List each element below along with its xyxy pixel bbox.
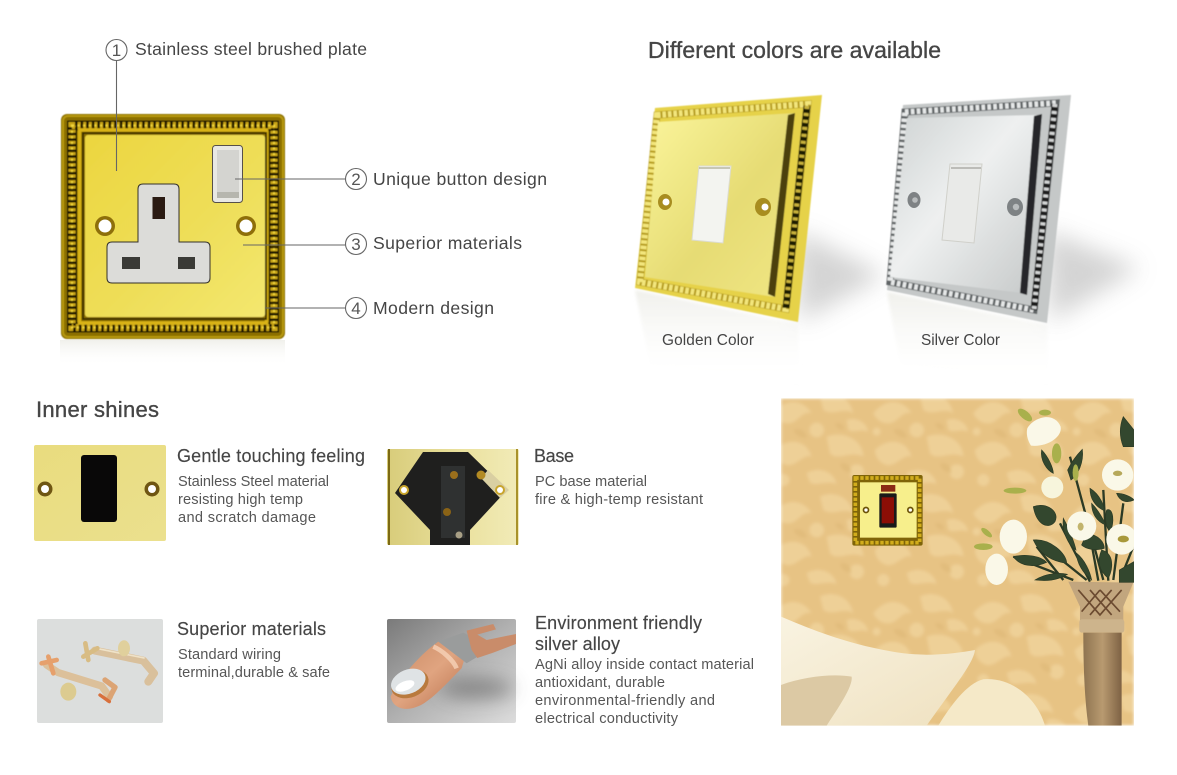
golden caption: Golden Color	[662, 332, 754, 349]
callout 4: 4	[351, 299, 361, 318]
silver screws	[908, 192, 1023, 216]
text block	[177, 446, 365, 526]
vase	[1068, 582, 1133, 726]
thumbnail: black base rear view	[387, 449, 519, 545]
silver reflection	[887, 292, 1050, 385]
callout 4: Modern design	[373, 298, 494, 318]
golden reflection	[635, 290, 800, 385]
text block: Gentle touching feeling	[177, 446, 365, 466]
heading: colors: Different colors are available	[648, 37, 941, 63]
text block	[534, 446, 703, 508]
text block: Base	[534, 446, 574, 466]
callout 3: Superior materials	[373, 233, 522, 253]
panel: main socket with callouts	[60, 39, 547, 366]
panel: base	[387, 446, 703, 545]
text block: fire & high-temp resistant	[535, 492, 703, 508]
text block	[177, 619, 330, 681]
text block	[535, 613, 754, 727]
buds	[974, 406, 1079, 550]
screw right	[236, 216, 256, 236]
text block: electrical conductivity	[535, 711, 679, 727]
thumbnail: brass terminals	[37, 619, 163, 723]
wall switch	[852, 475, 923, 546]
text block: silver alloy	[535, 634, 620, 654]
text block: Standard wiring	[178, 647, 281, 663]
panel: room photo	[781, 398, 1137, 726]
panel: superior materials	[37, 619, 330, 723]
text block: Environment friendly	[535, 613, 702, 633]
screw left	[95, 216, 115, 236]
callout 3: 3	[351, 235, 361, 254]
silver plate body	[887, 95, 1071, 323]
text block: AgNi alloy inside contact material	[535, 657, 754, 673]
text block: and scratch damage	[178, 510, 316, 526]
golden shadow	[795, 230, 885, 322]
callout 2	[235, 168, 547, 190]
panel: silver plate	[887, 95, 1140, 385]
sofa arm	[938, 679, 1045, 726]
large cushion	[781, 617, 975, 726]
golden rocker	[692, 166, 731, 243]
golden screws	[658, 194, 771, 216]
silver rocker	[942, 164, 982, 243]
text block: Superior materials	[177, 619, 326, 639]
callout 2: Unique button design	[373, 169, 547, 189]
text block: resisting high temp	[178, 492, 303, 508]
white flowers	[985, 417, 1137, 585]
thumbnail: copper contact with silver dome	[387, 619, 516, 723]
socket reflection	[60, 340, 285, 366]
golden plate body	[635, 95, 822, 322]
panel: golden plate	[635, 95, 885, 385]
flower stems and leaves	[1013, 417, 1134, 582]
silver shadow	[1045, 230, 1140, 322]
text block: PC base material	[535, 474, 647, 490]
callout 3	[243, 233, 522, 254]
text block: environmental-friendly and	[535, 693, 715, 709]
socket plate	[61, 114, 285, 339]
callout 4	[265, 298, 494, 318]
text block: antioxidant, durable	[535, 675, 665, 691]
thumbnail: brass plate with black rocker	[34, 445, 166, 541]
callout 2: 2	[351, 170, 361, 189]
heading: inner shines: Inner shines	[36, 397, 159, 422]
panel: gentle touching feeling	[34, 445, 365, 541]
damask wallpaper	[781, 398, 1134, 726]
text block: terminal,durable & safe	[178, 665, 330, 681]
callout 1: 1	[112, 41, 121, 60]
small patterned cushion	[781, 675, 852, 726]
callout 1: Stainless steel brushed plate	[135, 39, 367, 59]
rocker switch	[212, 146, 242, 202]
text block: Stainless Steel material	[178, 474, 329, 490]
callout 1	[106, 39, 367, 171]
UK socket face	[107, 184, 210, 283]
silver caption: Silver Color	[921, 332, 1000, 349]
panel: silver alloy	[387, 613, 754, 727]
